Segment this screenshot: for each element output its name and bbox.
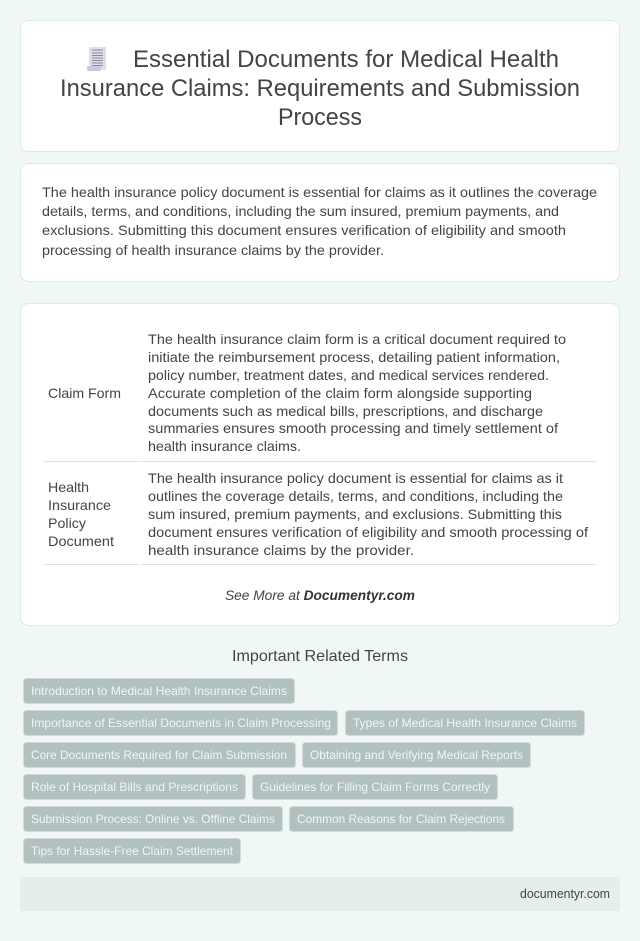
description text: exclusions. Submitting this document ensures verification of eligibility and smooth	[42, 222, 566, 238]
title: Essential Documents for Medical Health	[133, 46, 559, 73]
row text: Claim Form: summaries ensures smooth processing and timely settlement of	[148, 420, 558, 436]
row text: Claim Form: initiate the reimbursement process, detailing patient information,	[148, 349, 560, 365]
row label: Health Insurance Policy Document: Insurance	[48, 497, 111, 513]
tag	[252, 774, 498, 800]
row text: Claim Form: Accurate completion of the claim form alongside supporting	[148, 385, 532, 401]
title: Insurance Claims: Requirements and Submission	[60, 75, 580, 102]
row label: Health Insurance Policy Document: Policy	[48, 515, 86, 531]
tag	[302, 742, 530, 768]
icon: document scroll	[87, 47, 106, 71]
description text: The health insurance policy document is essential for claims as it outlines the coverage	[42, 184, 597, 200]
tag: Obtaining and Verifying Medical Reports	[310, 748, 523, 762]
heading: related terms: Important Related Terms	[232, 648, 408, 665]
row text: Health Insurance Policy Document	[148, 470, 588, 558]
panel: title card	[20, 20, 620, 152]
row text: Health Insurance Policy Document: health insurance claims by the provider.	[148, 542, 414, 558]
tag	[24, 774, 246, 800]
description text: processing of health insurance claims by the provider.	[42, 242, 384, 258]
footer	[20, 877, 620, 911]
see more link: See More at Documentyr.com	[225, 587, 415, 603]
tag: Role of Hospital Bills and Prescriptions	[31, 780, 238, 794]
tag: Types of Medical Health Insurance Claims	[353, 716, 577, 730]
panel: documents table	[20, 304, 620, 626]
tag	[24, 710, 338, 736]
tag: Introduction to Medical Health Insurance Claims	[31, 684, 287, 698]
tag	[24, 742, 296, 768]
row label: Health Insurance Policy Document	[48, 479, 114, 549]
description text	[42, 184, 597, 258]
row text: Claim Form	[148, 331, 566, 454]
tag: Importance of Essential Documents in Claim Processing	[31, 716, 331, 730]
row text: Health Insurance Policy Document: outlines the coverage details, terms, and conditions, including the	[148, 488, 563, 504]
tag	[24, 678, 294, 704]
row text: Health Insurance Policy Document: The health insurance policy document is essential for claims as it	[148, 470, 563, 486]
tag	[24, 838, 240, 864]
tag: Tips for Hassle-Free Claim Settlement	[31, 844, 234, 858]
row text: Claim Form: health insurance claims.	[148, 438, 301, 454]
row text: Health Insurance Policy Document: sum insured, premium payments, and exclusions. Submitting this	[148, 506, 562, 522]
row label: Health Insurance Policy Document: Document	[48, 533, 114, 549]
title	[60, 46, 580, 131]
row text: Claim Form: The health insurance claim form is a critical document required to	[148, 331, 566, 347]
tag: Guidelines for Filling Claim Forms Correctly	[260, 780, 490, 794]
title: Process	[278, 104, 362, 131]
tag: Common Reasons for Claim Rejections	[297, 812, 505, 826]
footer: documentyr.com	[520, 887, 610, 901]
row text: Health Insurance Policy Document: document ensures verification of eligibility and smooth processing of	[148, 524, 588, 540]
tag	[24, 806, 282, 832]
related terms tags	[24, 678, 584, 864]
row label: Claim Form: Claim Form	[48, 385, 121, 401]
tag	[290, 806, 514, 832]
row label: Health Insurance Policy Document: Health	[48, 479, 89, 495]
row text: Claim Form: policy number, treatment dates, and medical services rendered.	[148, 367, 549, 383]
row text: Claim Form: documents such as medical bills, prescriptions, and discharge	[148, 403, 543, 419]
tag	[346, 710, 584, 736]
panel: description	[20, 164, 620, 282]
description text: details, terms, and conditions, including the sum insured, premium payments, and	[42, 203, 559, 219]
tag: Submission Process: Online vs. Offline Claims	[31, 812, 275, 826]
tag: Core Documents Required for Claim Submission	[31, 748, 287, 762]
